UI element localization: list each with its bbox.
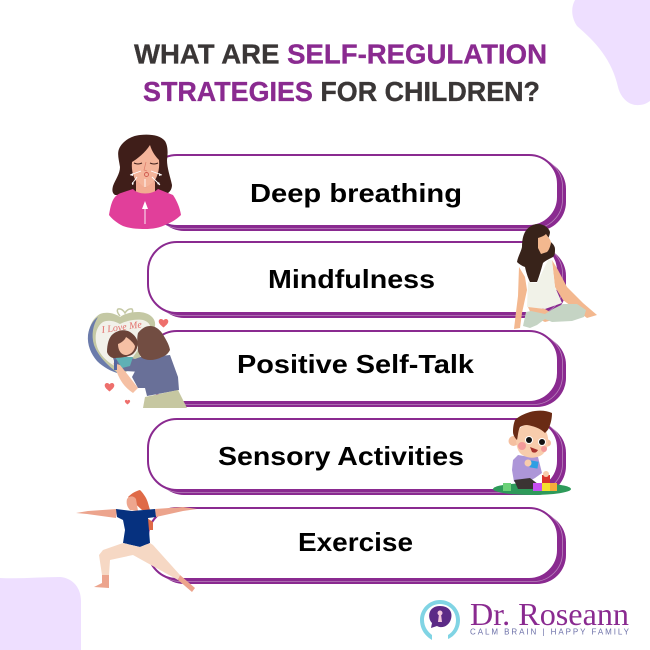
logo tagline: CALM BRAIN | HAPPY FAMILY — [470, 628, 630, 636]
label: sensory activities: Sensory Activities — [218, 441, 464, 471]
illustration: boy with blocks — [493, 411, 571, 495]
illustration: girl at mirror — [88, 309, 187, 408]
illustration: woman meditating — [514, 224, 597, 329]
panel: deep breathing — [148, 155, 566, 231]
heart — [105, 383, 114, 392]
panel: sensory activities — [148, 419, 566, 495]
logo: Dr. Roseann — [420, 596, 630, 640]
logo icon — [420, 600, 460, 640]
panel: exercise — [148, 508, 566, 584]
title: STRATEGIES FOR CHILDREN? — [143, 76, 540, 107]
label: mindfulness: Mindfulness — [268, 264, 435, 294]
heart — [159, 319, 168, 328]
decorative blob: top right — [572, 0, 650, 105]
label: positive self-talk: Positive Self-Talk — [237, 349, 475, 379]
illustration: woman in yoga pose — [76, 490, 197, 592]
illustration: woman breathing — [109, 135, 181, 229]
label: deep breathing: Deep breathing — [250, 178, 462, 208]
logo wordmark: Dr. Roseann — [470, 596, 629, 632]
label: exercise: Exercise — [298, 527, 413, 557]
decorative blob: bottom left — [0, 577, 81, 650]
panel: mindfulness — [148, 242, 566, 318]
panel: positive self-talk — [148, 331, 566, 407]
title — [134, 38, 547, 107]
mirror text: I Love Me — [100, 319, 143, 336]
heart — [125, 400, 130, 404]
title: WHAT ARE SELF-REGULATION — [134, 38, 547, 70]
